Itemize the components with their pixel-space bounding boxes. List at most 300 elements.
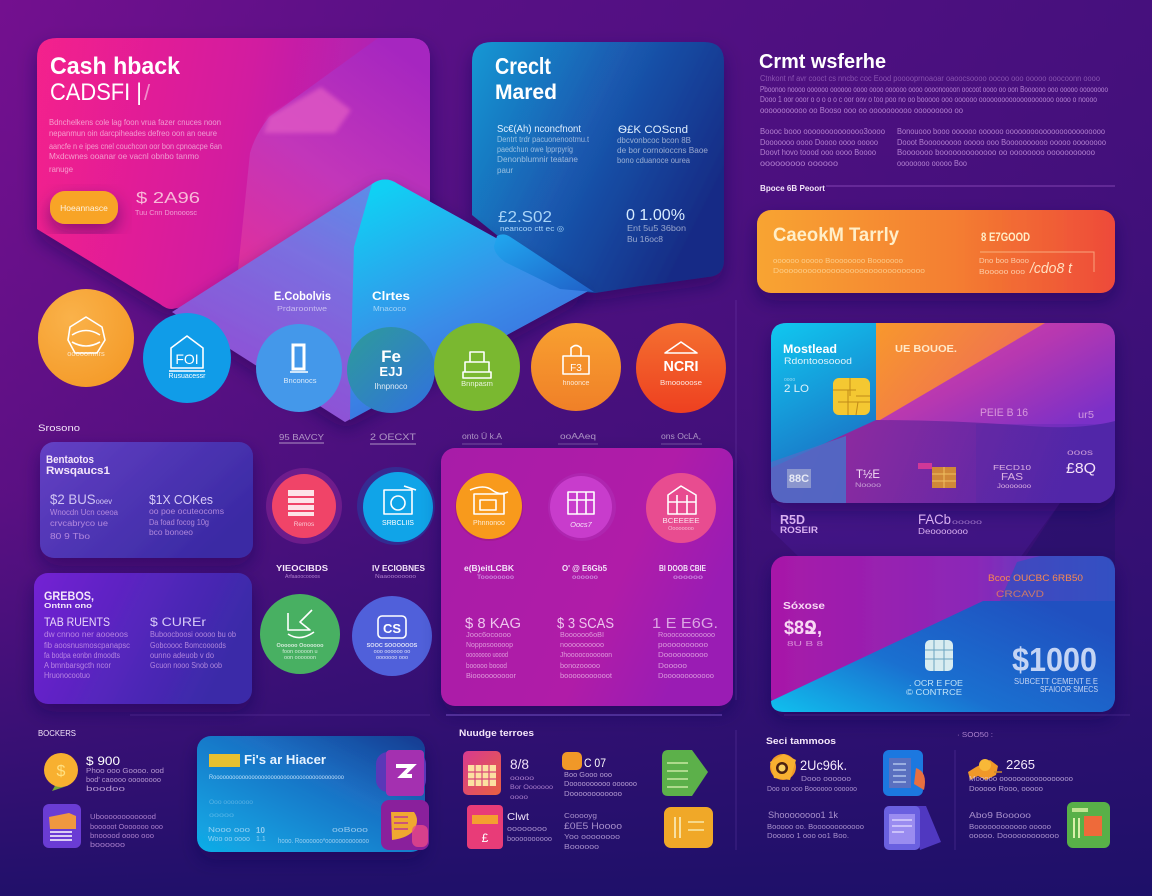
diamond light facet [350,180,590,420]
hero price note: Tuu Cnn Donooosc [135,208,197,217]
fish lower text: ooooo. Doooooooooooo [969,831,1059,840]
coin text: $ 900 [86,754,120,768]
labels above magenta panel [462,431,702,444]
gross heading [44,591,94,610]
icon: magenta tile [381,800,429,850]
rebate column two: Da foad focog 10g [149,518,209,527]
card subtitle: Rooooooooooooooooooooooooooooooooooooooooo [209,774,344,781]
text block: credit overview [759,51,1115,193]
icon: pale chip [925,640,953,671]
rebate heading [46,454,110,477]
circle: indigo fee: ooo oooooo oo [374,649,410,655]
credit stat two [626,207,686,244]
plan labels: BI DOOB CBIE [659,563,706,573]
labels between circle rows: YIEOCIBDS [276,563,328,573]
credit stat two: 0 1.00% [626,207,685,224]
icon: red card [467,805,503,849]
card stat strip: FECD10 [993,463,1031,472]
plan labels: e(B)eitLCBK [464,563,515,573]
icon: fish mascot [968,759,1002,780]
calendar text: oooo [510,794,528,801]
credit column one: Dentrt trdr pacuonenootmu.t [497,135,590,144]
overview column right: Dooot Booooooooo ooooo ooo Boooooooooo ooooo oooooooo [897,138,1107,147]
overview column left [760,127,886,168]
section label: borders: BOCKERS [38,728,76,738]
heading: cash back: CADSFI | [50,79,142,106]
amount caption: SFAIOOR SMECS [1040,685,1098,694]
fish lower text [969,810,1059,840]
card figures: ooos [1067,448,1093,457]
fish stat text: Dooooo Rooo, ooooo [969,784,1043,793]
rebate column one: crvcabryco ue [50,519,109,528]
panel: mastered card [771,323,1115,558]
card balance [784,377,809,395]
icon: violet document [884,806,941,850]
coin text: boodoo [86,784,125,793]
fish stat text [969,757,1073,793]
plan list two: bonozooooo [560,661,600,670]
credit column two: bono cduanoce ourea [617,156,691,165]
plan labels: O' @ E6Gb5 [562,563,607,573]
rebate heading: Rwsqaucs1 [46,465,110,477]
card left stat [783,601,826,648]
credit column two: Ѳ£K COScnd [618,124,688,136]
overview column left: Dooooooo oooo Doooo oooo ooooo [760,138,879,147]
plan circle: pink: Oooooooo [668,526,694,532]
section label: sections: Srosono [38,423,80,433]
plan list three: poooooooooo [658,640,708,649]
section label: faint: · SOO50 : [957,730,993,739]
rebate column one: Wnocdn Ucn coeoa [50,508,119,517]
gross column one: Hruonocootuo [44,671,90,680]
plan list one [465,615,521,680]
overview column right: Bonouooo booo oooooo oooooo oooooooooooooooooooooooo [897,127,1106,136]
button: Hoeannasce [60,203,108,213]
section: nudge terms [459,728,713,851]
credit column two: de bor cornoioccns Baoe [617,146,709,155]
calendar text: 8/8 [510,756,529,772]
plan circle: purple: Oocs7 [570,520,593,529]
overview column right: oooooooo ooooo Boo [897,159,967,168]
calendar text: ooooo [510,775,535,782]
circle: orange: F3 [570,363,582,374]
labels above magenta panel: onto Ü k.A [462,431,502,441]
rebate column two: $1X COKes [149,492,213,507]
card offer label: Bcoc OUCBC 6RB50 [988,573,1083,583]
gross heading: Ontnn ono [44,603,92,610]
circle: sky blue: Bnconocs [284,376,317,385]
rebate column one [50,491,119,541]
diamond tab [494,234,594,292]
credit column one: Sc€(Ah) nconcfnont [497,124,581,135]
heading: credit: Mared [495,81,557,104]
hero body text: aancfe n e ipes cnel couchcon oor bon cpnoacpe 6an [49,141,222,151]
credit column one: Denonblumnir teatane [497,155,579,164]
card stat strip: FAS [1001,472,1023,483]
circle: sky blue [256,324,342,412]
circle row: card categories [38,289,726,413]
circle: orange rewards [38,289,134,387]
button [50,191,118,224]
card figures: PEIE B 16 [980,407,1028,419]
credit column two [617,124,709,165]
panel: fees blue card [197,736,429,852]
plan list one: Bioooooooooor [466,671,516,680]
circle: blue fee: SRBCLIIS [382,520,414,527]
plan list three: 1 E E6G. [652,615,718,632]
orange card body: Dooooooooooooooooooooooooooooooo [773,266,925,275]
plan list two: booooooooooot [560,671,613,680]
plan list one: oooooooo uoood [466,650,508,659]
orange card right data: Booooo ooo [979,267,1025,276]
diamond label two: Mnacoco [373,306,406,313]
icon: gold chip [833,378,870,415]
gross column one: fa bodpa eonbn dmoodts [44,651,120,660]
rebate column two: bco bonoeo [149,528,194,537]
icon: orange tile [664,807,713,848]
labels above magenta panel: ons OcLA, [661,431,701,441]
below-card notes: Deooooooo [918,527,969,536]
icon and text: small orange stat: Doooooooooooo [564,791,622,798]
chip caption: © CONTRCE [906,687,962,697]
hero body text [49,117,222,174]
credit stat two: Ent 5u5 36bon [627,224,686,233]
hero price note: $ 2A96 [136,190,200,207]
report label and rule: Bpoce 6B Peoort [760,183,825,193]
labels between circle rows [276,563,425,580]
icon: lion mascot [770,754,796,780]
calendar text: Bor Ooooooo [510,784,553,791]
card figures: ur5 [1078,410,1094,421]
card balance: 2 LO [784,383,809,395]
dividers [130,300,1130,850]
plan list one: booooo boood [466,661,507,670]
orange card right data: Dno boo Booo [979,256,1029,265]
overview column right: Booooooo booooooooooooo oo oooooooo ooooooooooo [897,148,1096,157]
circle: green fee: foon ooooon u [282,649,318,655]
credit column two: dbcvonbcoc bcon 8B [617,136,691,145]
lion stat text: Doo oo ooo Boooooo oooooo [767,786,857,793]
circle: teal [347,327,435,413]
overview paragraph [760,74,1108,115]
red card text: boooooooooo [507,836,552,843]
panel: credit marketing [472,42,724,293]
gross column one: A bmnbarsgcth ncor [44,661,111,670]
circle: teal: EJJ [379,364,403,379]
circle: indigo fee: CS [383,621,401,636]
card faint notes: ooooo [209,812,235,819]
gross column one: fib aoosnusmoscpanapsc [44,641,130,650]
lion stat text: 2Uc96k. [800,757,847,773]
overview column left: Doovt hovo toood ooo oooo Boooo [760,148,877,157]
circle: blue bank: Rusuacessr [169,373,206,380]
icon: purple tile [376,750,426,796]
card foot data [208,826,369,845]
overview heading: Crmt wsferhe [759,51,886,73]
circle: orange [531,323,621,411]
wallet text: Ubooooooooooood [90,812,156,821]
card foot data: Nooo ooo [208,827,250,834]
hero price note [135,190,200,217]
plan labels [464,563,706,581]
gross column two: Gcuon nooo Snob oob [150,661,222,670]
fish stat text: Mooooo ooooooooooooooooo [969,774,1073,783]
overview column right [897,127,1107,168]
circle: teal: Fe [381,347,401,366]
diamond label one: E.Cobolvis [274,291,331,303]
circle: orange: hnoonce [563,380,590,387]
plan list three [652,615,718,680]
circle: indigo fee: ooooooo ooo [376,655,408,661]
stacked text [564,811,622,851]
below-card notes: R5D [780,512,805,527]
orange card right data [979,230,1094,277]
panel: cash back hero [37,38,430,309]
circle: orange rewards: ooooomnrs [67,349,105,358]
card title [783,342,852,366]
circle: red fee: Remos [294,521,315,528]
plan circle: pink [646,473,716,543]
plan labels: oooooo [572,574,598,581]
overview paragraph: Dooo 1 oor ooor o o o o o c oor oov o too poo no oo booooo ooo oooooo oooooooooooooooooooo oooo o noooo [760,95,1097,104]
card title: Mostlead [783,342,837,356]
section label: rewards: Seci tammoos [766,736,836,747]
gross column one: dw cnnoo ner aooeoos [44,630,128,639]
card foot data: ooBooo [332,827,368,834]
amount caption [1014,677,1098,694]
card figures [980,407,1094,457]
orange card body: oooooo ooooo Boooooooo Booooooo [773,256,903,265]
icon and text: small orange stat: Boo Gooo ooo [564,772,612,779]
lion stat text [767,757,857,793]
plan list one: Jooc6ocoooo [466,630,511,639]
circle: green: Bnnpasm [461,379,493,388]
gross column two: Buboocboosi ooooo bu ob [150,630,237,639]
red card text [507,811,552,843]
coin text: Phoo ooo Goooo. ood [86,766,164,775]
icon and text: small orange stat: Doooooooooo oooooo [564,781,637,788]
wallet text [90,812,163,849]
circle: green fee: oon oooooon [284,655,316,661]
icon: blue document [883,750,925,796]
lion stat text: Dooo oooooo [801,776,851,783]
wallet text: boooooo [90,840,125,849]
overview column left: Boooc booo oooooooooooooo3oooo [760,127,886,136]
orange card right data: 8 E7GOOD [981,230,1030,244]
heading: credit [495,53,557,104]
card blue corner [771,323,876,468]
heading: cash back: Cash hback [50,53,181,80]
icon and text: small orange stat [562,752,637,798]
plan circle: orange: Phnnonoo [473,520,505,527]
card gold strip [209,754,240,767]
panel: violet gross amounts [34,573,252,704]
below-card notes: FACb [918,511,951,527]
stacked text: Cooooyg [564,811,597,820]
plan labels: oooooo [673,574,703,581]
plan circle: orange [455,473,523,541]
card left stat: $8Ջ, [784,618,822,639]
card lower band shading [976,424,1115,503]
plan list three: Rooocooooooooo [658,630,715,639]
hero body text: Bdnchelkens cole lag foon vrua fazer cnuces noon [49,117,221,127]
plan circle: pink: BCEEEEE [662,518,700,525]
heading: cash back [50,53,181,106]
diamond label two: Clrtes [372,291,410,303]
lower rewards text [767,810,864,840]
stacked text: Boooooo [564,842,599,851]
coin text: bod' caoooo oooooooo [86,775,161,784]
icon: red calendar [463,751,501,795]
circle: red fee [266,468,342,544]
card stat strip: Noooo [855,482,882,489]
hero body text: nepanmun oin darcpiheades defreo oon an oeure [49,128,217,138]
chip caption [906,678,963,697]
card foot data: hooo. Rooooooo*ooooooooooooo [278,838,369,845]
rebate column two: oo poe ocuteocoms [149,507,224,516]
credit column one: paur [497,166,513,175]
card foot data: Woo oo oooo [208,836,250,843]
shadow wedge between right cards [1020,490,1115,565]
plan list one: Nopposooooop [466,640,513,649]
card stat strip: Jooooooo [997,483,1031,490]
card foot data: 1.1 [256,836,266,843]
panel: centre diamond [172,180,594,422]
card balance: oooo [784,377,795,383]
card stat strip: £8Q [1066,460,1096,477]
diamond label one [274,291,331,313]
card stat strip [787,460,1096,490]
circle: orange red: NCRI [664,358,698,375]
labels between circle rows: Naaoooooooo [375,574,416,580]
labels above magenta panel: ooAAeq [560,431,596,441]
overview paragraph: Ctnkont nf avr cooct cs nncbc coc Eood pooooprnoaoar oaoocsoooo oocoo ooo ooooo ooocoonn oooo [760,74,1101,83]
card stat strip: T½E [856,467,880,481]
coin text [86,754,164,793]
chip caption: . OCR E FOE [909,678,963,688]
plan circle: purple [548,473,616,541]
credit stat two: Bu 16oc8 [627,235,664,244]
below-card notes [780,511,983,536]
circle: green fee: Oooooo Ooooooo [276,643,324,649]
circle: blue fee [357,467,435,545]
card offer label: CRCAVD [996,589,1045,599]
heading: credit: Creclt [495,53,551,79]
credit stat one: neancoo ctt ec ◎ [500,224,564,233]
label pair above red and blue circles: 2 OECXT [370,432,416,443]
card top-right corner [1000,556,1115,601]
red card text: oooooooo [507,826,547,833]
card left stat: 8U B 8 [787,641,823,648]
label pair above red and blue circles: 95 BAVCY [279,432,324,442]
section: rewards bottom right [766,730,1110,850]
circle: indigo fee: SOOC SOOOOOOS [367,643,418,649]
overview paragraph: ooooooooooo oo Booso ooo oo oooooooooo ooooooooo oo [760,106,964,115]
plan list two: $ 3 SCAS [557,615,614,632]
stacked text: Yoo oooooooo [564,832,620,841]
wallet text: bnooood oooo ooo [90,831,154,840]
plan list three: Dooooo [658,661,687,670]
section: borders bottom left [38,728,164,849]
wallet text: booooot Ooooooo ooo [90,822,163,831]
big amount: $1000 [1012,641,1097,678]
lower rewards text: Booooo oo. Boooooooooooo [767,822,864,831]
card upper sweep [876,323,1115,427]
plan list two: Jhoooocoooooon [560,650,612,659]
facet: highlight [264,87,351,133]
hero body text: ranuge [49,164,73,174]
rebate column two [149,492,224,537]
circle: orange red: Bmooooose [660,378,702,387]
circle grid: fees [260,432,435,676]
card stat strip: 88C [789,473,809,485]
labels between circle rows: Arfaaoocoooos [285,574,320,580]
panel: magenta fee plans [441,448,733,706]
icon: green tile [1067,802,1110,848]
red card text: Clwt [507,811,529,823]
gross column two [150,615,237,670]
circle: green fee [260,594,340,674]
orange card right data: /cdo8 t [1029,260,1073,277]
icon and text: small orange stat: C 07 [584,756,606,770]
card offer label [988,573,1083,599]
credit stat one: £2.S02 [498,209,552,226]
gross column two: ounno adeuob v do [150,651,215,660]
credit stat one [498,209,564,233]
label pair above red and blue circles [279,432,416,444]
icon: green tag [662,750,708,796]
circle: orange red [636,323,726,413]
card faint notes: Ooo oooooooo [209,799,253,806]
plan labels: Toooooooo [477,574,514,581]
card orange triangle [876,323,1045,420]
plan list one: $ 8 KAG [465,615,521,632]
lower rewards text: Shoooooooo1 1k [768,810,839,820]
card title: Rdontoosoood [784,356,852,366]
icon: gold coin badge: $ [57,763,66,780]
plan list two: noooooooooo [560,640,604,649]
card header note: UE BOUOE. [895,343,957,355]
fish stat text: 2265 [1006,757,1035,772]
plan list two [557,615,614,680]
heading: cash back: / [144,80,151,105]
credit column one: paedchun owe lpprpyrig [497,145,573,154]
card left stat: Sóxose [783,601,826,612]
card faint notes [209,799,253,819]
circle: indigo fee [352,596,432,676]
lower rewards text: Dooooo 1 ooo oo1 Boo. [767,831,849,840]
calendar text [510,756,553,801]
circle: green [434,323,520,411]
rebate column one: $2 BUSooev [50,491,112,507]
icon: red card: £ [482,831,489,845]
gross column one [44,615,130,680]
gross column one: TAB RUENTS [44,615,110,629]
card lower left facet [771,436,846,503]
gross heading: GREBOS, [44,591,94,603]
card title: Fi's ar Hiacer [244,753,326,767]
plan list two: Boooooo6oBI [560,630,604,639]
circle: blue bank [143,313,231,403]
icon: purple wallet tile [43,804,81,848]
circle: blue bank: FOI [175,351,199,367]
rebate column one: 80 9 Tbo [50,532,91,541]
plan list three: Doooooooooooo [658,671,714,680]
below-card notes: ooooo [952,520,983,526]
facet: glossy fold [238,38,430,270]
card blue sweep [771,601,1115,712]
panel: orange cash card [757,210,1115,293]
